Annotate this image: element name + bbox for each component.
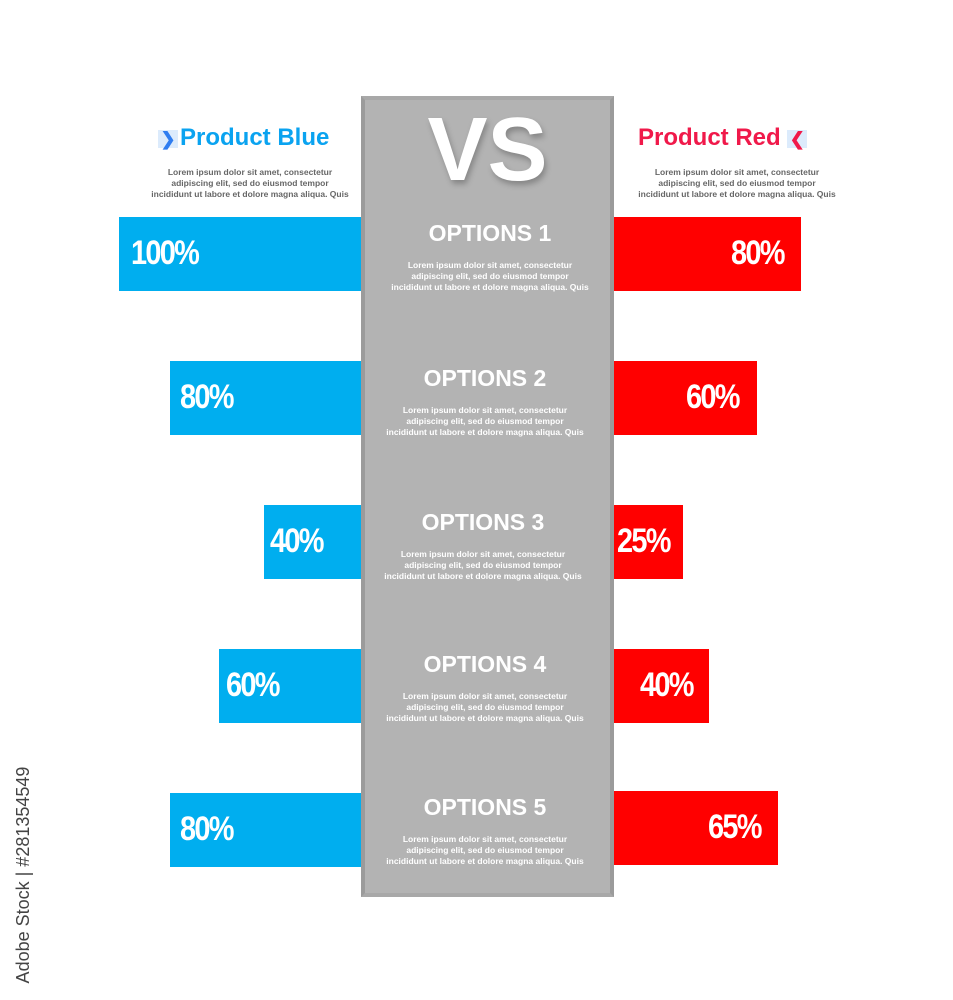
bar: blue 80% [170, 793, 361, 867]
option 2: OPTIONS 2 [424, 365, 546, 391]
watermark id: Adobe Stock | #281354549 [13, 767, 33, 983]
option 2: Lorem ipsum dolor sit amet, consectetur [403, 405, 567, 415]
bar: blue 100%: 100% [131, 234, 198, 272]
bar: red 65% [614, 791, 778, 865]
center panel [361, 96, 614, 897]
option 3: adipiscing elit, sed do eiusmod tempor [404, 560, 562, 570]
option 3: incididunt ut labore et dolore magna aliqua. Quis [384, 571, 582, 581]
bar: blue 80%: 80% [180, 810, 233, 848]
bar: red 80% [614, 217, 801, 291]
bar: red 60% [614, 361, 757, 435]
bar: red 65%: 65% [708, 808, 761, 846]
VS heading: VS [427, 100, 548, 200]
option 3: OPTIONS 3 [422, 509, 544, 535]
option 5 [386, 794, 584, 866]
bar: red 40%: 40% [640, 666, 693, 704]
option 3: Lorem ipsum dolor sit amet, consectetur [401, 549, 565, 559]
bar: red 25%: 25% [617, 522, 670, 560]
bar: red 60%: 60% [686, 378, 739, 416]
option 4: OPTIONS 4 [424, 651, 546, 677]
option 5: incididunt ut labore et dolore magna aliqua. Quis [386, 856, 584, 866]
option 5: Lorem ipsum dolor sit amet, consectetur [403, 834, 567, 844]
bar: red 40% [614, 649, 709, 723]
bar: red 25% [614, 505, 683, 579]
heading: Product Blue: Product Blue [180, 124, 329, 151]
bar: blue 80%: 80% [180, 378, 233, 416]
heading: Product Red: ❮ [790, 129, 805, 149]
option 2: incididunt ut labore et dolore magna aliqua. Quis [386, 427, 584, 437]
text: blue description: incididunt ut labore et dolore magna aliqua. Quis [151, 189, 349, 199]
heading: Product Red: Product Red [638, 124, 781, 151]
option 1: OPTIONS 1 [429, 220, 551, 246]
text: blue description [151, 167, 349, 199]
option 1: adipiscing elit, sed do eiusmod tempor [411, 271, 569, 281]
option 3 [384, 509, 582, 581]
option 1 [391, 220, 589, 292]
bar: red 80%: 80% [731, 234, 784, 272]
heading: Product Blue: ❯ [160, 129, 176, 149]
option 4: adipiscing elit, sed do eiusmod tempor [406, 702, 564, 712]
option 5: adipiscing elit, sed do eiusmod tempor [406, 845, 564, 855]
bar: blue 100% [119, 217, 361, 291]
text: red description: incididunt ut labore et dolore magna aliqua. Quis [638, 189, 836, 199]
text: red description [638, 167, 836, 199]
option 1: Lorem ipsum dolor sit amet, consectetur [408, 260, 572, 270]
bar: blue 60%: 60% [226, 666, 279, 704]
text: blue description: Lorem ipsum dolor sit amet, consectetur [168, 167, 332, 177]
bar: blue 60% [219, 649, 361, 723]
bar: blue 40%: 40% [270, 522, 323, 560]
option 4: Lorem ipsum dolor sit amet, consectetur [403, 691, 567, 701]
option 5: OPTIONS 5 [424, 794, 546, 820]
bar: blue 40% [264, 505, 361, 579]
option 2 [386, 365, 584, 437]
option 1: incididunt ut labore et dolore magna aliqua. Quis [391, 282, 589, 292]
option 2: adipiscing elit, sed do eiusmod tempor [406, 416, 564, 426]
text: red description: adipiscing elit, sed do eiusmod tempor [658, 178, 816, 188]
option 4: incididunt ut labore et dolore magna aliqua. Quis [386, 713, 584, 723]
option 4 [386, 651, 584, 723]
bar: blue 80% [170, 361, 361, 435]
text: blue description: adipiscing elit, sed do eiusmod tempor [171, 178, 329, 188]
text: red description: Lorem ipsum dolor sit amet, consectetur [655, 167, 819, 177]
